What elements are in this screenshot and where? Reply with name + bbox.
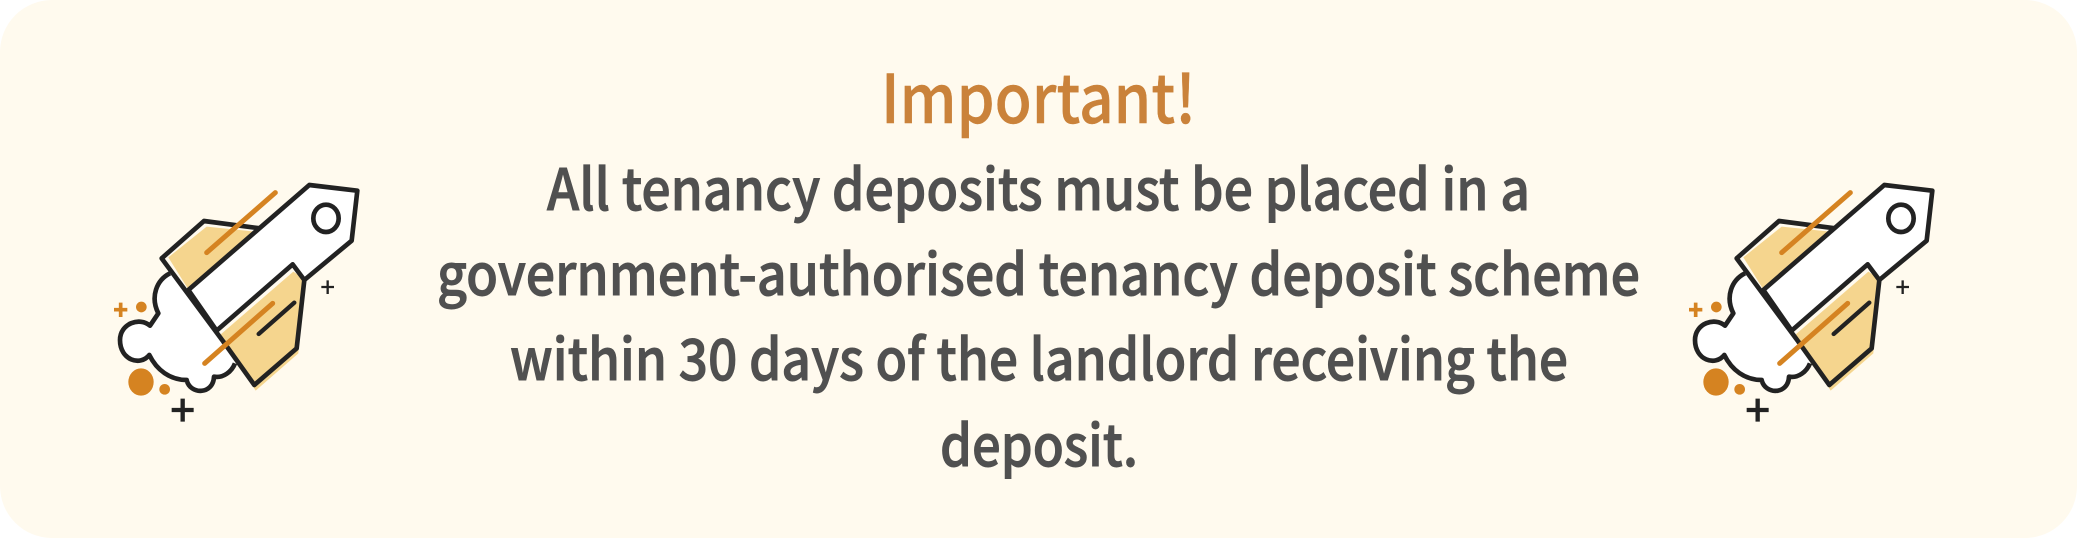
body text: deposit. bbox=[940, 401, 1138, 483]
heading: Important! bbox=[881, 46, 1196, 143]
icon: rocket left bbox=[114, 185, 357, 422]
body text: All tenancy deposits must be placed in a bbox=[547, 145, 1530, 227]
body text bbox=[437, 145, 1640, 483]
body text: government-authorised tenancy deposit scheme bbox=[437, 230, 1640, 312]
icon: rocket right bbox=[1689, 185, 1932, 422]
body text: within 30 days of the landlord receiving the bbox=[510, 315, 1568, 397]
